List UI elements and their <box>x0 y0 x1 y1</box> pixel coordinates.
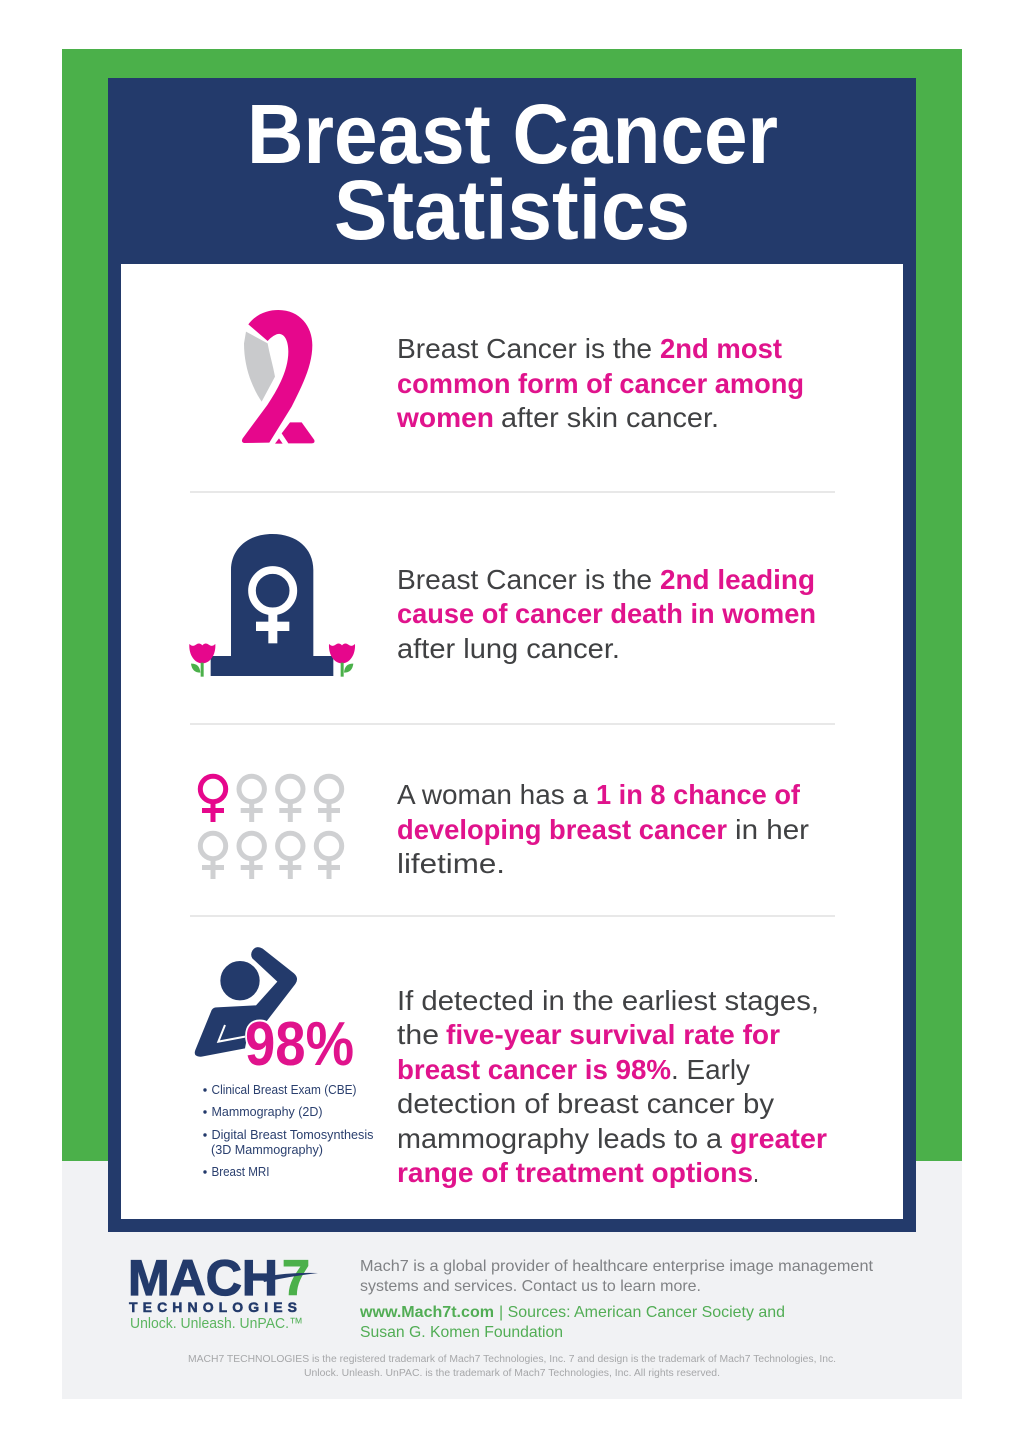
text: 1 in 8 chance <box>397 779 809 879</box>
text: early detection survival: mammography leads to a <box>397 1123 722 1154</box>
text: company description: Mach7 is a global provider of healthcare enterprise image management <box>360 1258 874 1275</box>
list: screening methods: Digital Breast Tomosynthesis <box>212 1128 374 1142</box>
text: second most common: women <box>396 402 494 433</box>
text: second most common: after skin cancer. <box>501 402 719 433</box>
text: 1 in 8 chance: A woman has a <box>397 779 588 810</box>
logo: Mach7 Technologies: 7 <box>282 1250 310 1306</box>
title <box>247 87 778 257</box>
text: early detection survival: the <box>397 1019 439 1050</box>
text: early detection survival: greater <box>730 1123 827 1154</box>
text: early detection survival: . <box>753 1157 759 1188</box>
panel: early detection survival <box>195 947 827 1188</box>
list: screening methods <box>203 1083 374 1179</box>
text: 1 in 8 chance: lifetime. <box>397 848 505 879</box>
text: second leading cause of death: 2nd leading <box>660 564 815 595</box>
text: 1 in 8 chance: developing breast cancer <box>397 814 727 845</box>
title: Statistics <box>334 163 690 257</box>
text: second most common: 2nd most <box>660 333 782 364</box>
panel: 1 in 8 chance <box>200 776 809 879</box>
icon: gravestone with tulips <box>189 534 355 677</box>
text: second leading cause of death: Breast Cancer is the <box>397 564 652 595</box>
text: trademark notice <box>188 1354 836 1379</box>
text: website and sources: www.Mach7t.com <box>359 1304 494 1321</box>
text: trademark notice: MACH7 TECHNOLOGIES is the registered trademark of Mach7 Technologies, Inc. 7 and design is the trademark of Mach7 Technologies, Inc. <box>188 1354 836 1365</box>
list: screening methods: Breast MRI <box>212 1165 270 1179</box>
logo: Mach7 Technologies: MACH <box>128 1250 278 1306</box>
list: screening methods: (3D Mammography) <box>211 1143 323 1157</box>
green background panel <box>62 49 962 1161</box>
logo: Mach7 Technologies: TECHNOLOGIES <box>129 1299 297 1315</box>
icon: pink ribbon <box>242 310 315 444</box>
text: 1 in 8 chance: in her <box>735 814 809 845</box>
text: website and sources: | Sources: American Cancer Society and <box>499 1304 785 1321</box>
text: second most common: Breast Cancer is the <box>397 333 652 364</box>
grey footer background <box>62 1161 962 1399</box>
white content panel <box>121 264 903 1219</box>
text: company description: systems and services. Contact us to learn more. <box>360 1278 701 1295</box>
text: 1 in 8 chance: 1 in 8 chance of <box>596 779 801 810</box>
text: early detection survival <box>397 985 827 1188</box>
statistic: 98%: 98% <box>245 1010 354 1079</box>
text: second leading cause of death: cause of cancer death in women <box>397 598 816 629</box>
text: early detection survival: detection of breast cancer by <box>397 1088 774 1119</box>
text: website and sources: Susan G. Komen Foundation <box>360 1324 563 1341</box>
title: Breast Cancer <box>247 87 778 181</box>
text: early detection survival: breast cancer is 98% <box>397 1054 671 1085</box>
text: second most common <box>396 333 804 433</box>
text: second most common: common form of cancer among <box>397 368 804 399</box>
list: screening methods: Mammography (2D) <box>212 1105 322 1119</box>
text: early detection survival: If detected in the earliest stages, <box>397 985 819 1016</box>
icon: eight female symbols, one highlighted <box>200 776 342 879</box>
text: early detection survival: . Early <box>671 1054 750 1085</box>
panel: second leading cause of death <box>189 534 816 677</box>
text: second leading cause of death <box>397 564 816 664</box>
navy frame <box>108 78 916 1232</box>
text: trademark notice: Unlock. Unleash. UnPAC. is the trademark of Mach7 Technologies, Inc. All rights reserved. <box>304 1368 720 1379</box>
text: company description <box>360 1258 874 1295</box>
panel: second most common <box>242 310 804 444</box>
logo: Mach7 Technologies <box>128 1250 318 1332</box>
logo: Mach7 Technologies: Unlock. Unleash. UnPAC.™ <box>130 1315 303 1332</box>
text: website and sources <box>359 1304 785 1341</box>
icon: self exam figure <box>195 947 297 1057</box>
text: early detection survival: range of treatment options <box>397 1157 753 1188</box>
list: screening methods: Clinical Breast Exam (CBE) <box>212 1083 356 1097</box>
text: early detection survival: five-year survival rate for <box>446 1019 780 1050</box>
text: second leading cause of death: after lung cancer. <box>397 633 620 664</box>
